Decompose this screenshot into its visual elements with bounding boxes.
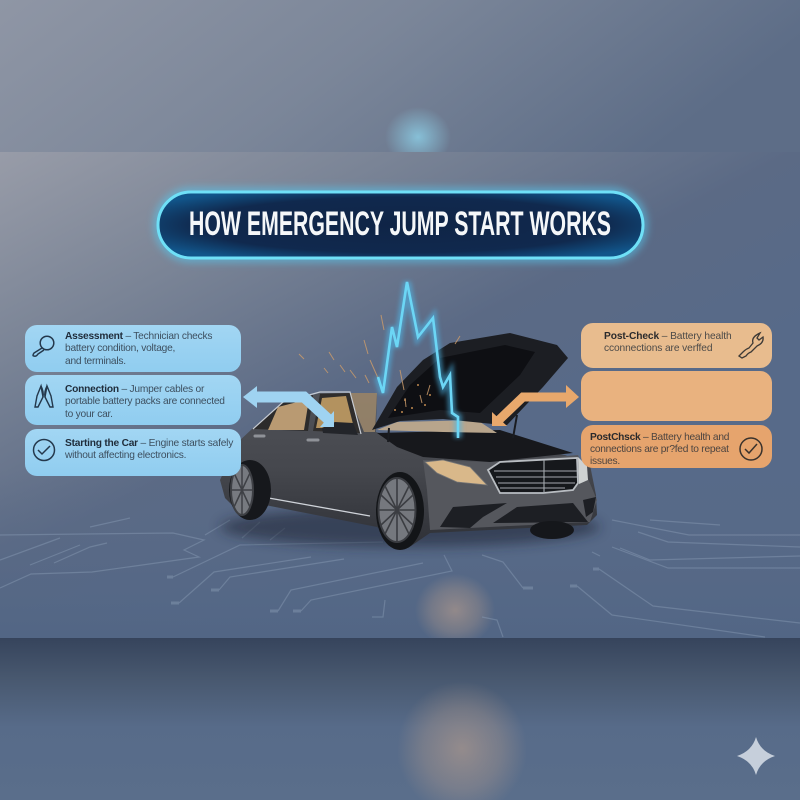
card: connection [25, 375, 241, 425]
left panel: process steps [25, 325, 241, 476]
headlight [425, 460, 487, 485]
right headlamp [578, 457, 588, 484]
background: top strip [0, 0, 800, 152]
card: post-check top [581, 323, 772, 368]
front right tyre [530, 521, 574, 539]
blue double arrow [243, 386, 334, 427]
front wheel [376, 472, 424, 550]
hood struts [388, 415, 517, 442]
text: connection: portable battery packs are connected [65, 396, 225, 407]
right panel: post-check steps [581, 323, 772, 468]
icon: check circle [34, 440, 54, 460]
door handles [255, 436, 318, 440]
background: bottom strip [0, 638, 800, 800]
car body [220, 393, 597, 548]
orange double arrow [492, 385, 579, 426]
side mirror [322, 422, 358, 435]
icon: magnifier [33, 336, 54, 356]
text: starting the car: without affecting electronics. [64, 450, 186, 461]
car ground shadow [220, 507, 600, 547]
engine bay [377, 430, 573, 462]
text: post-check bottom: issues. [590, 456, 620, 467]
rear wheel [229, 460, 271, 520]
text: assessment: and terminals. [65, 356, 126, 367]
bumper intakes [440, 503, 507, 528]
text: post-check top: Post-Check – Battery health [604, 331, 732, 342]
sparks [299, 315, 460, 407]
text: connection: Connection – Jumper cables or [65, 384, 204, 395]
icon: wrench [739, 333, 763, 358]
lightning bolt [378, 282, 458, 438]
card: starting the car [25, 429, 241, 476]
text: connection: to your car. [65, 409, 113, 420]
door sill chrome [263, 497, 370, 516]
hood sparks [394, 384, 431, 413]
open hood [372, 333, 568, 430]
icon: jumper clamps [35, 386, 53, 407]
title banner [158, 192, 643, 258]
text: assessment: Assessment – Technician checks [65, 331, 212, 342]
text: starting the car: Starting the Car – Engine starts safely [65, 438, 233, 449]
card: empty middle [581, 371, 772, 421]
text: post-check top: cconnections are verffed [604, 343, 713, 354]
background: central band [0, 152, 800, 638]
circuit board traces on floor [0, 518, 800, 637]
grille [488, 458, 578, 493]
card: post-check bottom [581, 425, 772, 468]
windshield [348, 393, 377, 432]
card: assessment [25, 325, 241, 372]
front bumper highlight [423, 455, 597, 530]
side windows [253, 392, 361, 434]
text: post-check bottom: connections are pr?fed to repeat [590, 444, 729, 455]
windshield strip under hood [377, 420, 497, 433]
car illustration [220, 333, 600, 550]
text: assessment: battery condition, voltage, [65, 343, 175, 354]
text: post-check bottom: PostChsck – Battery health and [590, 432, 729, 443]
icon: sparkle watermark [737, 737, 775, 775]
icon: check circle [740, 438, 762, 460]
